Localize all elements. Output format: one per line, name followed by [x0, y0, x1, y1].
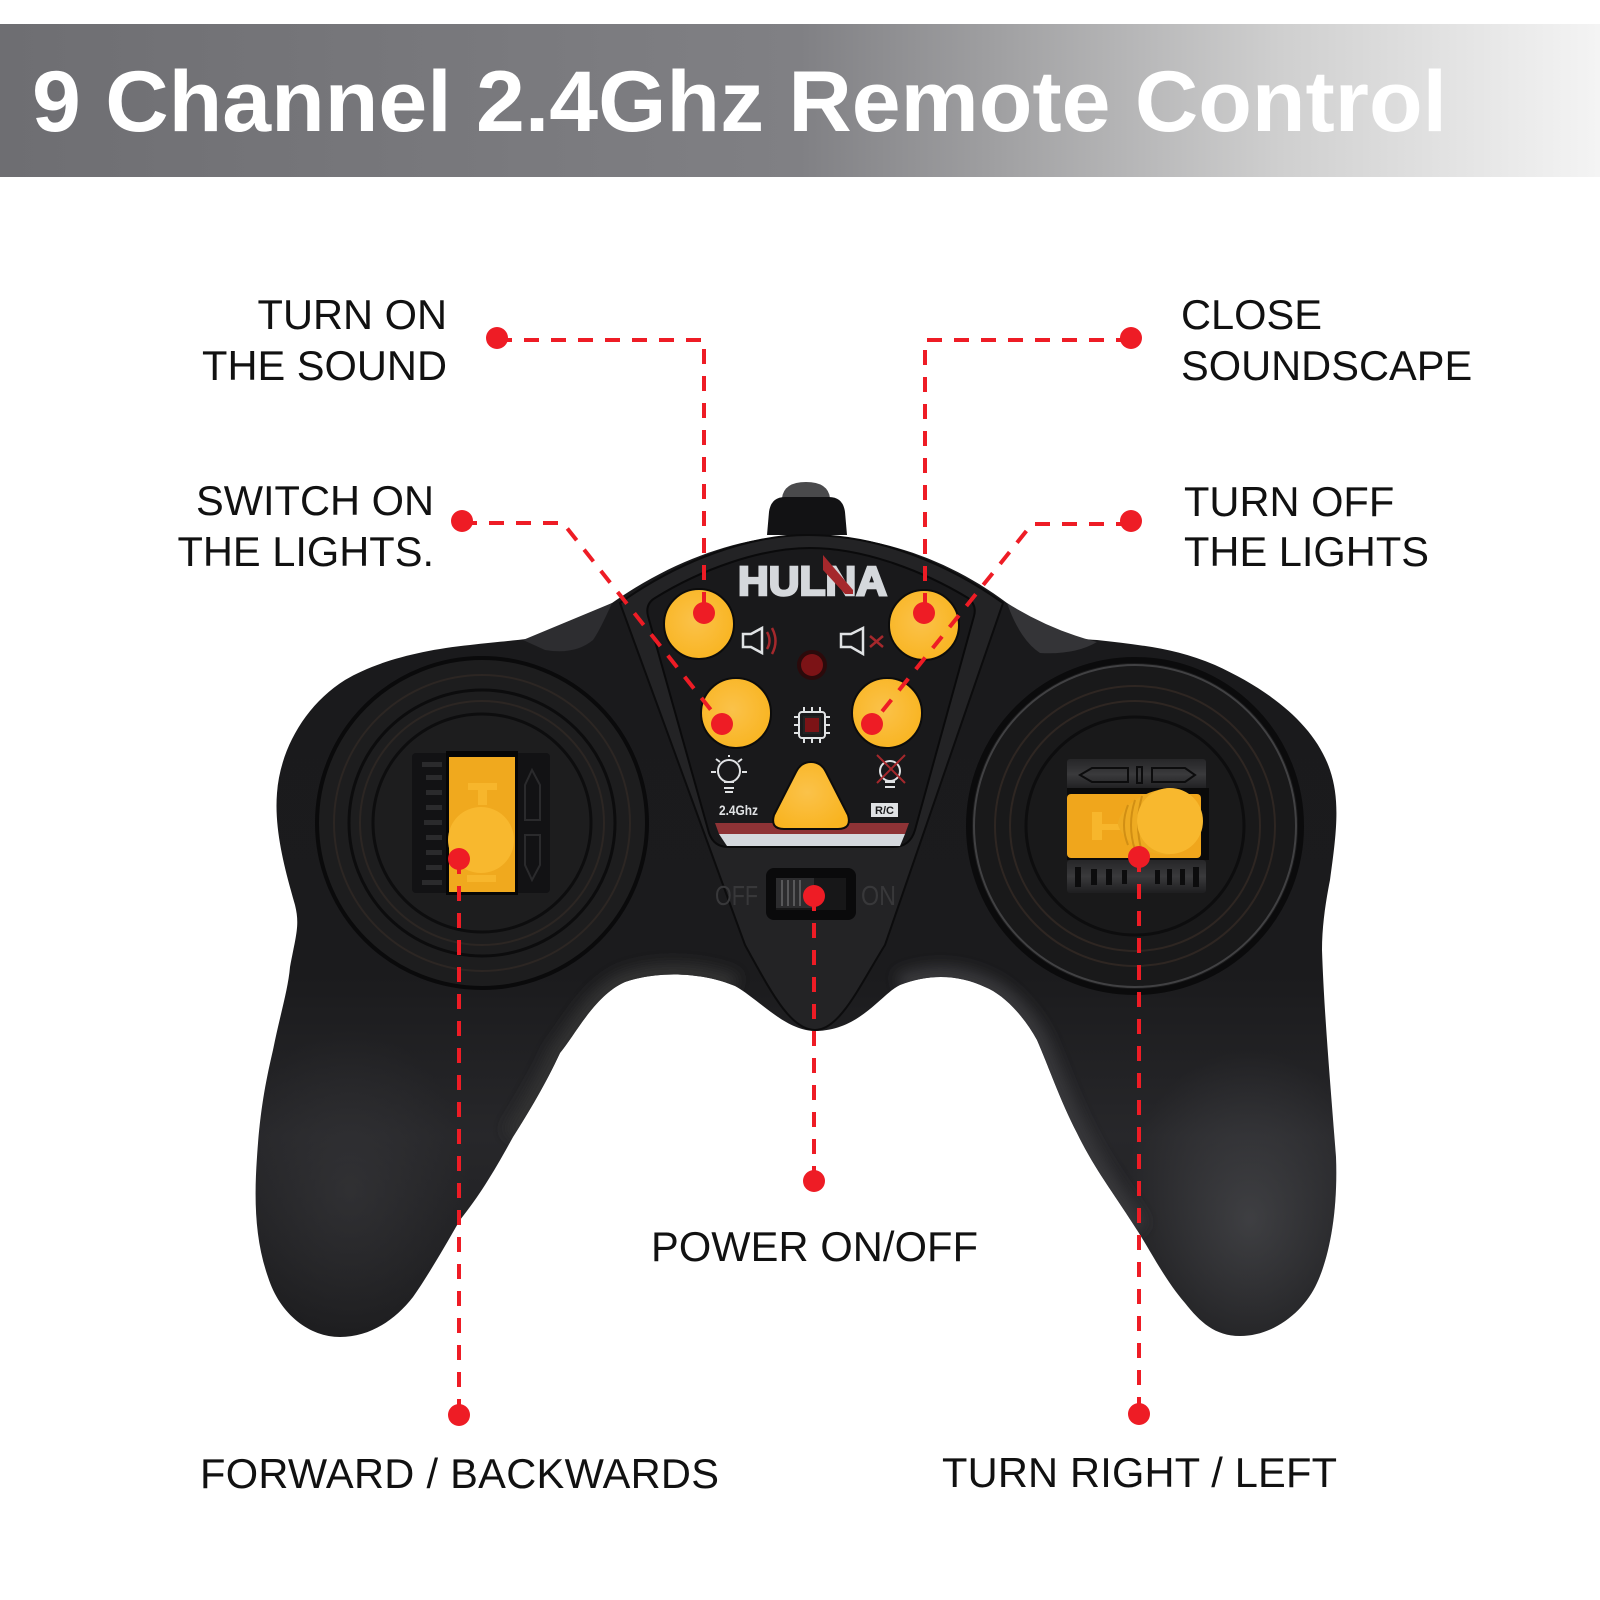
header banner [0, 24, 1600, 177]
title: 9 Channel 2.4Ghz Remote Control [32, 54, 1447, 150]
right stick [1067, 759, 1209, 893]
label: turn right / left: TURN RIGHT / LEFT [942, 1449, 1337, 1496]
label: close soundscape: CLOSE [1181, 291, 1322, 338]
remote controller [256, 482, 1336, 1337]
label: close soundscape: SOUNDSCAPE [1181, 342, 1472, 389]
center shield [620, 535, 1003, 1030]
buttons [664, 589, 959, 829]
controller body [256, 539, 1336, 1337]
antenna [767, 482, 847, 535]
icon: chip [794, 707, 830, 743]
label: R/C: R/C [875, 805, 894, 817]
label: turn on the sound: TURN ON [258, 291, 447, 338]
label: switch on the lights: SWITCH ON [196, 477, 434, 524]
button panel [647, 548, 975, 847]
shoulder highlight left [523, 603, 612, 651]
power switch [766, 868, 856, 920]
callout lines [459, 340, 1139, 1415]
stripe: red and white [715, 823, 909, 846]
label: R/C [871, 803, 898, 817]
label: turn off the lights: TURN OFF [1184, 478, 1394, 525]
right stick well [969, 660, 1301, 992]
LED [797, 650, 827, 680]
left stick well [317, 658, 647, 988]
icon: sound on [743, 628, 776, 654]
label: close soundscape [1181, 291, 1472, 389]
label: forward / backwards: FORWARD / BACKWARDS [200, 1450, 719, 1497]
shoulder highlight right [1007, 603, 1097, 653]
logo: HULNA [738, 558, 887, 604]
callout dots [448, 327, 1150, 1426]
icon: sound off [841, 628, 883, 654]
label: switch on the lights [177, 477, 434, 575]
label: ON: ON [861, 880, 896, 911]
label: power on/off: POWER ON/OFF [651, 1223, 978, 1270]
icon: bulb off [877, 755, 905, 787]
label: switch on the lights: THE LIGHTS. [177, 528, 434, 575]
label: turn on the sound: THE SOUND [202, 342, 447, 389]
label: turn off the lights [1184, 478, 1429, 575]
label: turn off the lights: THE LIGHTS [1184, 528, 1429, 575]
left stick [412, 751, 550, 895]
label: turn on the sound [202, 291, 447, 389]
label: OFF: OFF [715, 880, 758, 911]
icon: bulb on [711, 755, 747, 792]
label: 2.4Ghz: 2.4Ghz [719, 802, 758, 818]
